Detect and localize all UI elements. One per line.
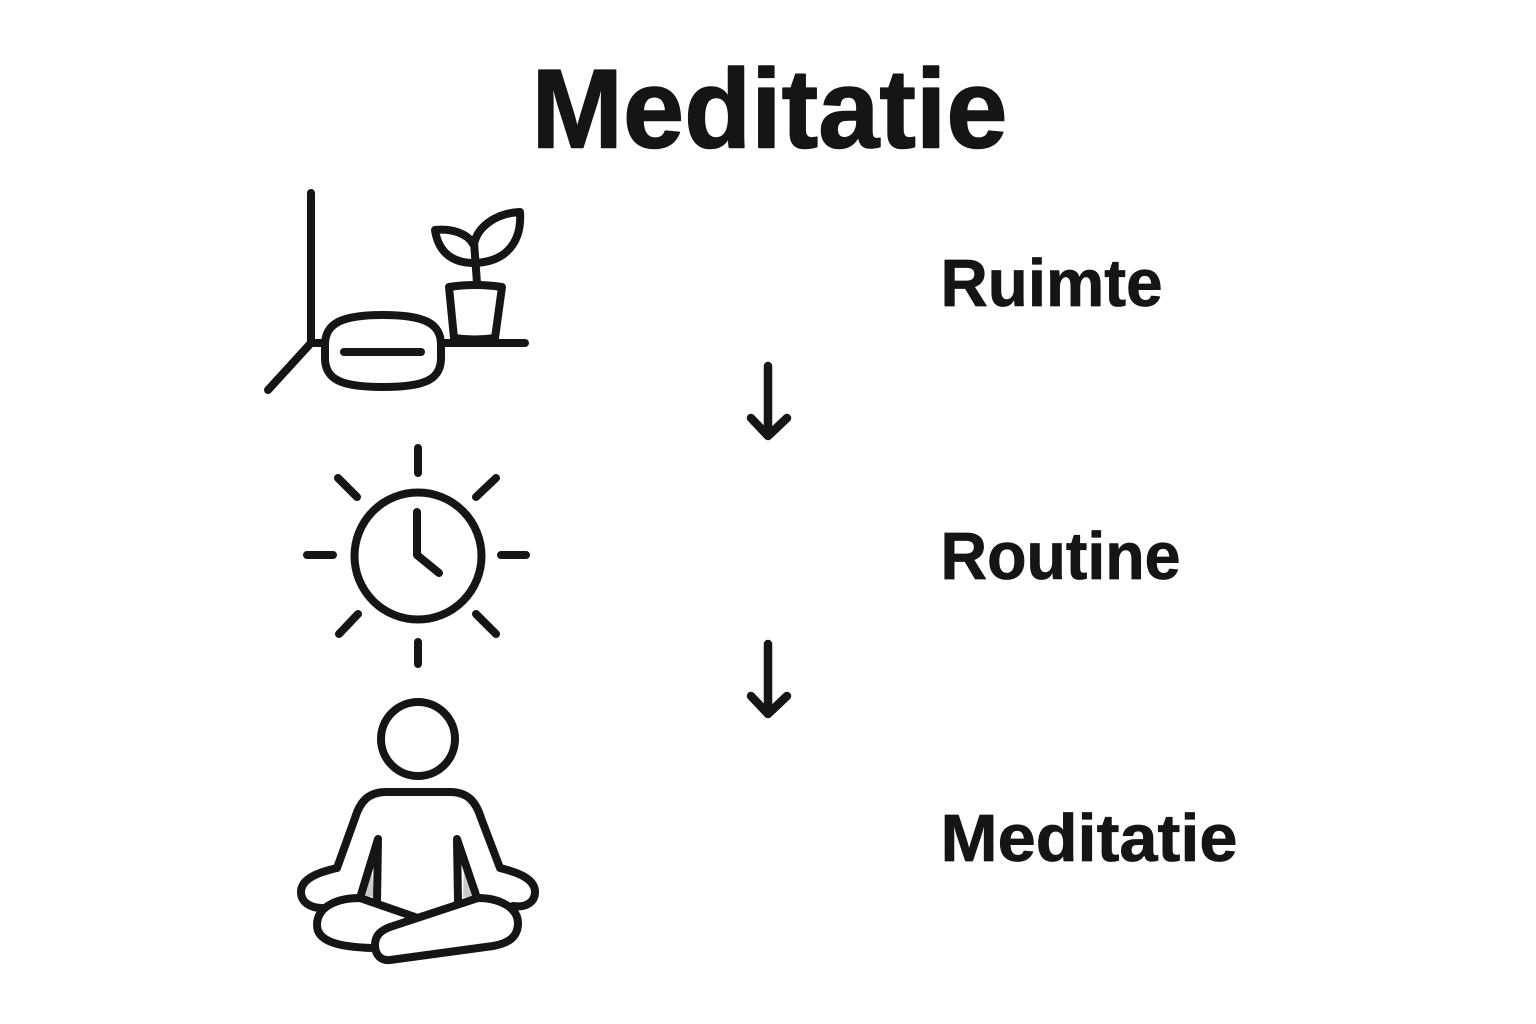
arrow: Ruimte to Routine — [751, 366, 787, 436]
icon: clock with sun rays — [307, 448, 526, 664]
label: Ruimte: Ruimte — [940, 246, 1162, 321]
back leg — [317, 898, 415, 948]
label: Meditatie: Meditatie — [940, 801, 1238, 876]
inner arm shading — [365, 872, 472, 897]
icon: meditating person — [301, 702, 535, 960]
label: Routine: Routine — [940, 519, 1180, 594]
arrow: Routine to Meditatie — [751, 644, 787, 714]
icon: room with cushion and plant — [268, 193, 525, 390]
title: Meditatie — [532, 46, 1008, 172]
torso and arms — [301, 792, 535, 908]
front leg — [375, 898, 518, 960]
head — [381, 702, 455, 776]
inner arm lines — [360, 839, 477, 902]
